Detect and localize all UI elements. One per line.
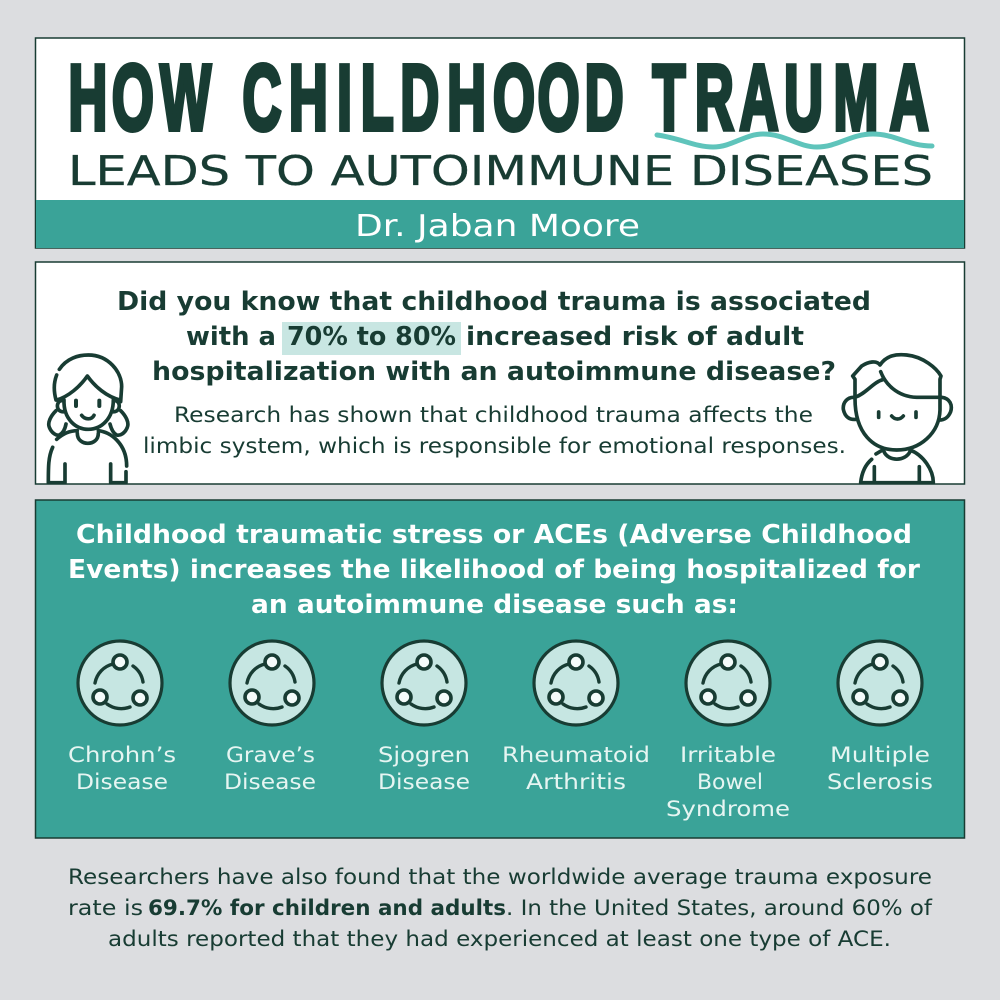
disease: Rheumatoid Arthritis: Rheumatoid (502, 743, 650, 767)
disease: Irritable Bowel Syndrome: Irritable (680, 743, 776, 767)
icon: boy (843, 355, 951, 483)
disease: Grave's Disease (224, 641, 316, 794)
disease: Chrohn's Disease: Disease (76, 770, 168, 794)
disease: Rheumatoid Arthritis: Arthritis (526, 770, 626, 794)
closing text: . In the United States, around 60% of (506, 896, 932, 921)
disease: Multiple Sclerosis: Sclerosis (827, 770, 933, 794)
closing text: adults reported that they had experienced at least one type of ACE. (108, 927, 891, 952)
question text: 70% to 80% (287, 322, 456, 352)
panel: title banner (36, 38, 964, 248)
closing text: Researchers have also found that the worldwide average trauma exposure (68, 865, 932, 890)
disease: Multiple Sclerosis: Multiple (830, 743, 930, 767)
disease: Grave's Disease: Grave’s (226, 743, 315, 767)
question text (117, 287, 871, 387)
disease: Rheumatoid Arthritis (502, 641, 650, 794)
question text: hospitalization with an autoimmune disease? (152, 357, 836, 387)
supporting text: Research has shown that childhood trauma affects the (174, 403, 813, 428)
panel heading: Childhood traumatic stress or ACEs (Adverse Childhood (76, 520, 912, 550)
panel: did you know (36, 262, 964, 484)
disease: Sjogren Disease: Sjogren (378, 743, 470, 767)
disease: Irritable Bowel Syndrome (666, 641, 790, 821)
wavy underline (657, 134, 932, 147)
disease: Multiple Sclerosis (827, 641, 933, 794)
question text: increased risk of adult (466, 322, 804, 352)
disease: Chrohn's Disease: Chrohn’s (68, 743, 176, 767)
title: trauma: TRAUMA (652, 46, 929, 150)
supporting text: limbic system, which is responsible for emotional responses. (143, 434, 846, 459)
panel: ACEs and diseases (36, 500, 964, 838)
supporting text (143, 403, 846, 459)
disease: Sjogren Disease (378, 641, 470, 794)
disease: Grave's Disease: Disease (224, 770, 316, 794)
question text: Did you know that childhood trauma is associated (117, 287, 871, 317)
panel heading (68, 520, 920, 620)
subtitle: LEADS TO AUTOIMMUNE DISEASES (68, 147, 933, 195)
closing text (68, 865, 932, 952)
disease: Chrohn's Disease (68, 641, 176, 794)
highlight: 70% to 80% (282, 322, 461, 355)
question text: with a (186, 322, 276, 352)
disease: Irritable Bowel Syndrome: Bowel (697, 770, 763, 794)
closing text: 69.7% for children and adults (148, 896, 506, 921)
closing text: rate is (68, 896, 143, 921)
panel heading: an autoimmune disease such as: (251, 590, 738, 620)
disease: Sjogren Disease: Disease (378, 770, 470, 794)
title: how childhood: HOW CHILDHOOD (68, 46, 624, 150)
author: Dr. Jaban Moore (355, 209, 640, 244)
author bar (36, 200, 964, 248)
panel heading: Events) increases the likelihood of being hospitalized for (68, 555, 920, 585)
disease: Irritable Bowel Syndrome: Syndrome (666, 797, 790, 821)
icon: girl (48, 355, 128, 483)
